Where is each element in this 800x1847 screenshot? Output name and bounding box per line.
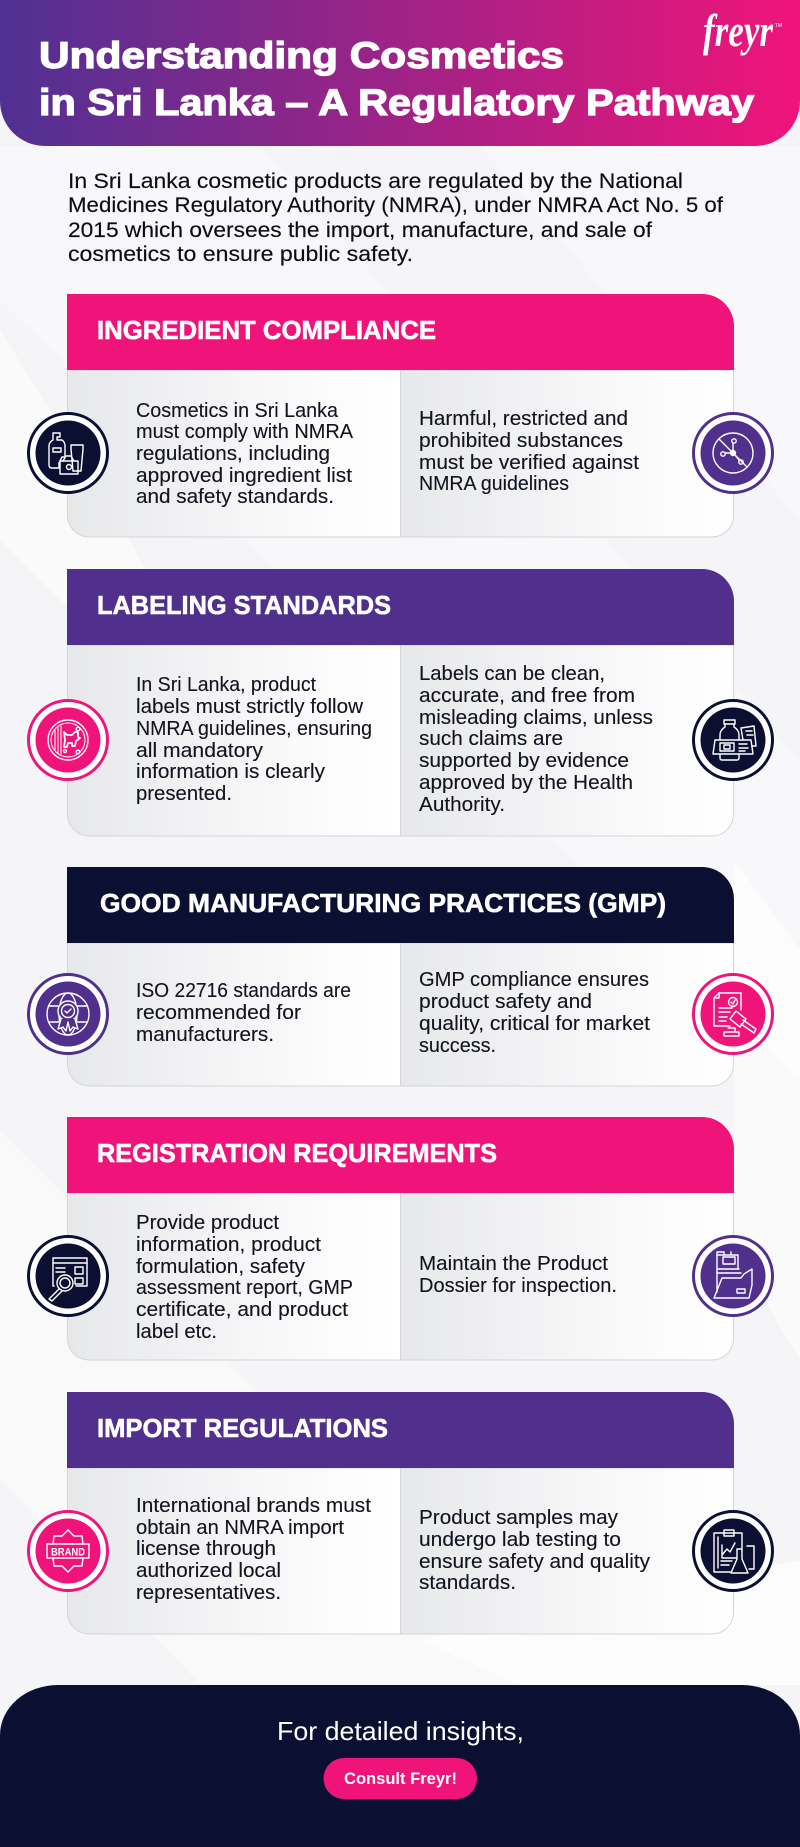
- icon: browser with magnifier: [28, 1236, 108, 1316]
- text: left column: [136, 1495, 371, 1604]
- text: left column: [136, 674, 372, 805]
- logo: freyr: TM: [775, 23, 782, 29]
- text: left column: and safety standards.: [136, 486, 334, 508]
- text: right column: GMP compliance ensures: [419, 969, 649, 991]
- header bar: IMPORT REGULATIONS: [97, 1413, 388, 1443]
- text: left column: Cosmetics in Sri Lanka: [136, 400, 339, 422]
- intro paragraph: In Sri Lanka cosmetic products are regulated by the National: [68, 169, 683, 193]
- panel: labeling standards: [28, 569, 772, 836]
- text: left column: In Sri Lanka, product: [136, 674, 316, 696]
- text: right column: Dossier for inspection.: [419, 1275, 617, 1297]
- text: left column: certificate, and product: [136, 1299, 348, 1321]
- icon: Sri Lanka lion flag: [28, 700, 108, 780]
- text: left column: ISO 22716 standards are: [136, 980, 351, 1002]
- text: left column: obtain an NMRA import: [136, 1517, 344, 1539]
- text: left column: label etc.: [136, 1321, 217, 1343]
- icon: brand badge: BRAND: [51, 1546, 85, 1558]
- icon: dossier folder: [694, 1236, 772, 1316]
- text: right column: product safety and: [419, 991, 592, 1013]
- text: right column: such claims are: [419, 728, 563, 750]
- text: right column: [419, 663, 653, 816]
- text: right column: [419, 408, 639, 495]
- text: right column: NMRA guidelines: [419, 473, 569, 495]
- intro paragraph: cosmetics to ensure public safety.: [68, 242, 413, 266]
- header bar: [67, 294, 734, 370]
- title banner: [0, 0, 800, 146]
- panel: registration requirements: [28, 1117, 772, 1360]
- text: right column: supported by evidence: [419, 750, 629, 772]
- logo: freyr: freyr: [703, 5, 774, 56]
- text: left column: representatives.: [136, 1582, 281, 1604]
- panel: ingredient compliance: [28, 294, 772, 537]
- text: right column: quality, critical for market: [419, 1013, 650, 1035]
- text: left column: presented.: [136, 783, 232, 805]
- intro paragraph: 2015 which oversees the import, manufacture, and sale of: [68, 218, 652, 242]
- title: in Sri Lanka – A Regulatory Pathway: [39, 81, 754, 123]
- icon: globe with badge: [28, 974, 108, 1054]
- text: left column: approved ingredient list: [136, 465, 352, 487]
- text: left column: labels must strictly follow: [136, 696, 364, 718]
- text: left column: regulations, including: [136, 443, 330, 465]
- text: right column: ensure safety and quality: [419, 1551, 650, 1573]
- footer text: For detailed insights,: [277, 1716, 524, 1746]
- text: right column: Product samples may: [419, 1507, 618, 1529]
- text: left column: International brands must: [136, 1495, 371, 1517]
- icon: prohibited molecule: [694, 414, 772, 492]
- text: right column: approved by the Health: [419, 772, 633, 794]
- text: left column: must comply with NMRA: [136, 421, 354, 443]
- text: right column: [419, 1507, 650, 1594]
- icon: clipboard with flasks: [694, 1512, 772, 1590]
- text: left column: [136, 1212, 353, 1343]
- button: consult freyr: Consult Freyr!: [344, 1769, 457, 1788]
- header bar: [67, 867, 734, 943]
- text: right column: accurate, and free from: [419, 685, 635, 707]
- header bar: LABELING STANDARDS: [97, 590, 391, 620]
- header bar: GOOD MANUFACTURING PRACTICES (GMP): [100, 888, 666, 918]
- icon: brand badge: [28, 1512, 108, 1590]
- text: right column: standards.: [419, 1572, 516, 1594]
- text: left column: information is clearly: [136, 761, 325, 783]
- text: right column: Labels can be clean,: [419, 663, 605, 685]
- header bar: [67, 1392, 734, 1468]
- header bar: INGREDIENT COMPLIANCE: [97, 315, 436, 345]
- intro paragraph: [68, 169, 723, 266]
- panel: import regulations: [28, 1392, 772, 1634]
- text: left column: NMRA guidelines, ensuring: [136, 718, 372, 740]
- header bar: [67, 569, 734, 645]
- text: right column: [419, 1253, 617, 1297]
- text: right column: Harmful, restricted and: [419, 408, 628, 430]
- title: Understanding Cosmetics: [39, 34, 564, 76]
- text: right column: must be verified against: [419, 452, 639, 474]
- text: right column: Maintain the Product: [419, 1253, 608, 1275]
- button: consult freyr: [324, 1758, 477, 1799]
- text: right column: [419, 969, 650, 1057]
- text: right column: prohibited substances: [419, 430, 623, 452]
- icon: labelled bottle: [694, 700, 772, 780]
- text: left column: all mandatory: [136, 740, 263, 762]
- panel: footer: [0, 1685, 800, 1847]
- text: left column: formulation, safety: [136, 1256, 305, 1278]
- icon: cosmetic bottles: [28, 414, 108, 492]
- text: left column: [136, 980, 351, 1046]
- text: right column: success.: [419, 1035, 496, 1057]
- intro paragraph: Medicines Regulatory Authority (NMRA), under NMRA Act No. 5 of: [68, 193, 723, 217]
- text: left column: Provide product: [136, 1212, 279, 1234]
- text: left column: authorized local: [136, 1560, 281, 1582]
- text: left column: recommended for: [136, 1002, 301, 1024]
- panel: good manufacturing practices: [28, 867, 772, 1086]
- text: right column: undergo lab testing to: [419, 1529, 621, 1551]
- header bar: [67, 1117, 734, 1193]
- text: left column: information, product: [136, 1234, 321, 1256]
- text: right column: misleading claims, unless: [419, 707, 653, 729]
- title: [39, 34, 754, 123]
- text: left column: manufacturers.: [136, 1024, 274, 1046]
- header bar: REGISTRATION REQUIREMENTS: [97, 1138, 497, 1168]
- text: left column: license through: [136, 1538, 276, 1560]
- text: right column: Authority.: [419, 794, 505, 816]
- text: left column: [136, 400, 354, 508]
- icon: document with gavel: [694, 974, 772, 1054]
- text: left column: assessment report, GMP: [136, 1277, 353, 1299]
